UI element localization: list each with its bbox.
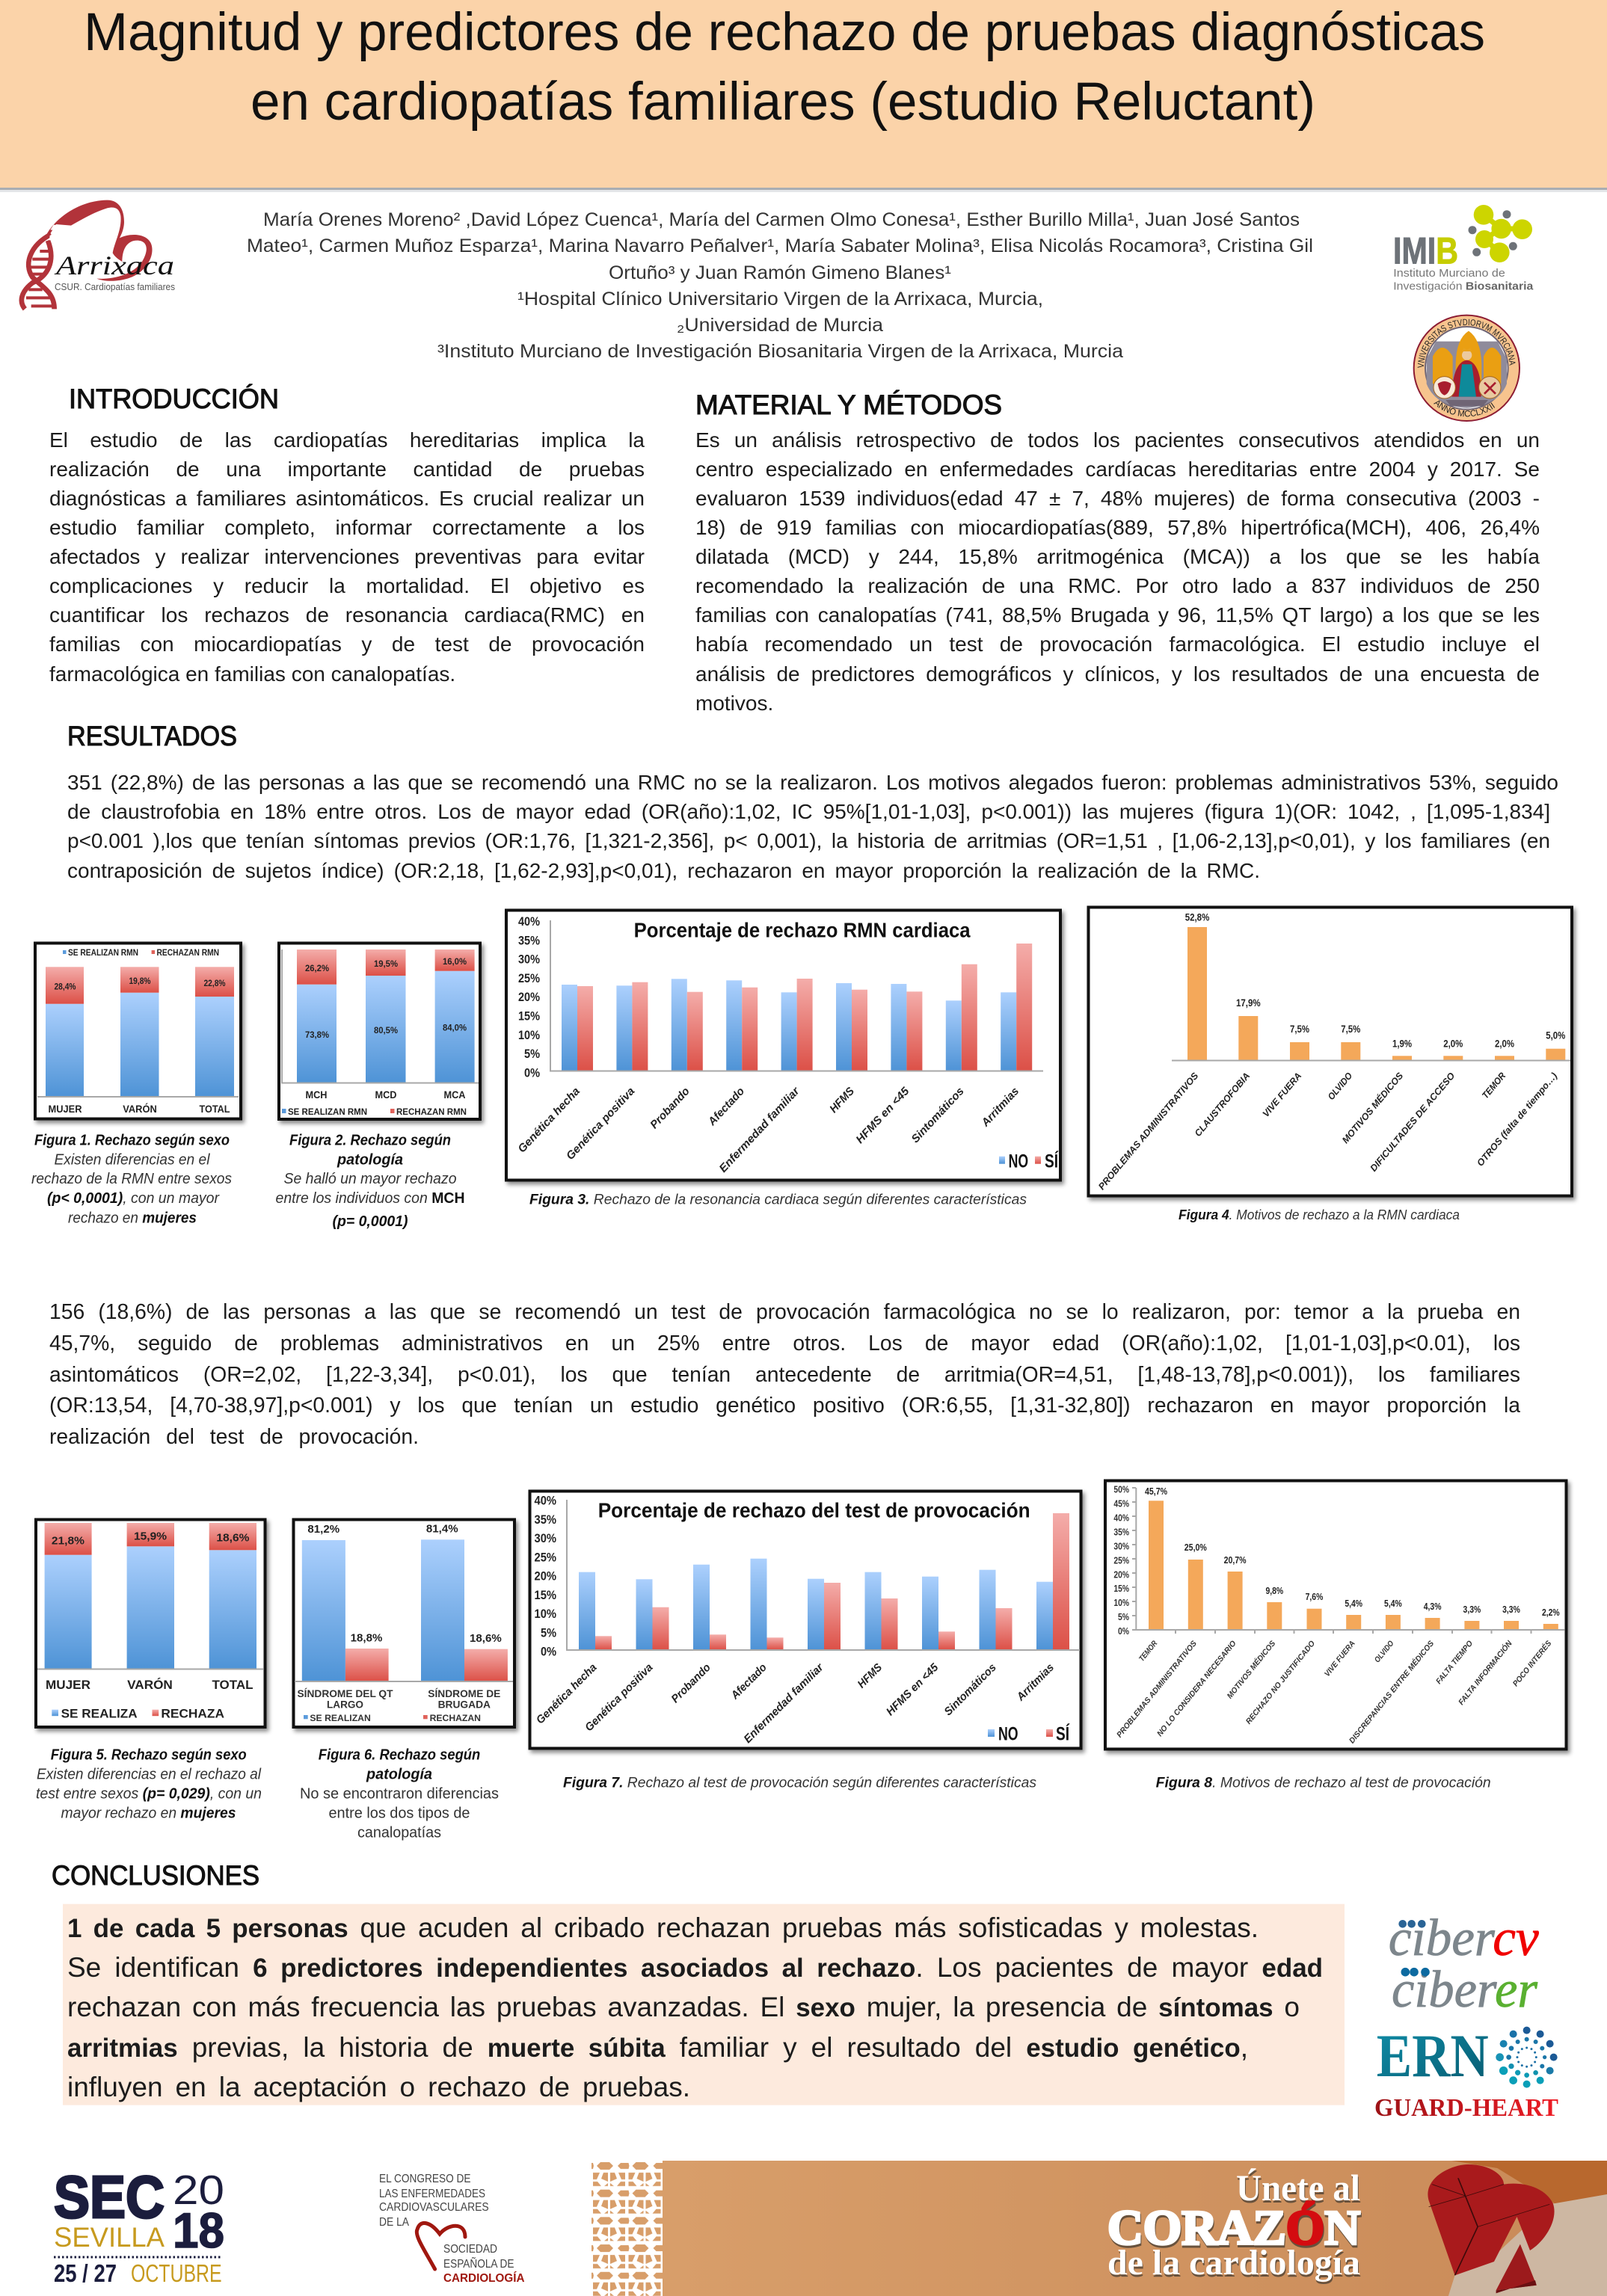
value labels: 17,9% <box>1236 997 1261 1009</box>
value labels: 4,3% <box>1424 1601 1441 1612</box>
value labels: 3,3% <box>1463 1604 1481 1615</box>
value labels: 7,5% <box>1341 1023 1361 1035</box>
text block: conclusiones: 1 de cada 5 personas que acuden al cribado rechazan pruebas más sofisticadas y molestas. <box>67 1912 1259 1943</box>
text block: introduccion: cuantificar los rechazos de resonancia cardiaca(RMC) en <box>49 603 645 627</box>
value labels: 5,4% <box>1345 1598 1362 1609</box>
x axis labels: Arritmias <box>1014 1661 1057 1704</box>
values and categories: TOTAL <box>212 1678 253 1692</box>
x axis labels: Probando <box>669 1661 713 1705</box>
values and categories: MCD <box>375 1089 396 1101</box>
x axis labels: MOTIVOS MÉDICOS <box>1225 1639 1277 1700</box>
x axis labels: PROBLEMAS ADMINISTRATIVOS <box>1096 1070 1201 1192</box>
values and categories: 16,0% <box>443 956 467 967</box>
grouped bars <box>295 1539 513 1681</box>
values and categories: 26,2% <box>305 963 329 973</box>
caption figure 4: Figura 4. Motivos de rechazo a la RMN cardiaca <box>1179 1207 1460 1222</box>
slogan <box>1107 2167 1360 2283</box>
text block: conclusiones <box>67 1912 1323 2102</box>
caption figure 2: Se halló un mayor rechazo <box>284 1171 456 1187</box>
authors and affiliations: Mateo¹, Carmen Muñoz Esparza¹, Marina Navarro Peñalver¹, María Sabater Molina³, Elisa Nicolás Rocamora³, Cristina Gil <box>247 236 1313 256</box>
text block: resultados RMC: p<0.001 ),los que tenían síntomas previos (OR:1,76, [1,321-2,356], p< 0,001), la historia de arritmias (OR=1,51 , [1,06-2,13],p<0,01), y los familiares (en <box>67 829 1550 852</box>
slogan: CORAZÓN <box>1107 2201 1360 2256</box>
logo: cibercv: cibercv <box>1389 1909 1540 1967</box>
values <box>307 1522 502 1645</box>
value labels: 5,4% <box>1384 1598 1402 1609</box>
authors and affiliations: ¹Hospital Clínico Universitario Virgen de la Arrixaca, Murcia, <box>517 289 1043 310</box>
x axis labels: Enfermedad familiar <box>716 1084 802 1175</box>
x axis labels <box>515 1084 1021 1175</box>
values and categories: VARÓN <box>127 1678 173 1692</box>
legend: NO <box>998 1723 1018 1744</box>
values and categories: 84,0% <box>443 1023 467 1033</box>
legend: RECHAZA <box>161 1708 224 1721</box>
y axis labels: 0% <box>524 1066 540 1080</box>
logo: SEC 2018 Sevilla: 25 / 27 <box>54 2259 117 2287</box>
y axis labels: 30% <box>1113 1540 1129 1551</box>
caption figure 1 <box>31 1133 232 1227</box>
heart puzzle <box>1428 2164 1555 2275</box>
values and categories: MCH <box>305 1089 328 1101</box>
figure 7: porcentaje de rechazo del test de provocacion <box>529 1491 1081 1748</box>
caption figure 5: Existen diferencias en el rechazo al <box>37 1766 262 1782</box>
y axis labels: 15% <box>518 1009 540 1023</box>
caption figure 6: entre los dos tipos de <box>329 1806 470 1822</box>
x axis labels: Arritmias <box>979 1085 1021 1130</box>
value labels: 20,7% <box>1224 1555 1247 1566</box>
logo: Sociedad Espanola de Cardiologia: CARDIOLOGÍA <box>443 2272 525 2285</box>
title: Magnitud y predictores de rechazo de pruebas diagnósticas <box>84 3 1485 62</box>
value labels: 2,2% <box>1542 1607 1560 1618</box>
y axis labels: 10% <box>1113 1597 1129 1608</box>
text block: material y metodos: dilatada (MCD) y 244, 15,8% arritmogénica (MCA)) a los que se les había <box>695 545 1540 568</box>
logo: SEC 2018 Sevilla: 20 <box>173 2167 224 2213</box>
values and categories: 15,9% <box>134 1530 167 1543</box>
x axis labels: POCO INTERÉS <box>1511 1639 1553 1688</box>
logo: Sociedad Espanola de Cardiologia: EL CONGRESO DE <box>379 2173 471 2185</box>
authors and affiliations: Ortuño³ y Juan Ramón Gimeno Blanes¹ <box>609 262 951 283</box>
y axis labels: 10% <box>534 1607 556 1621</box>
authors and affiliations: María Orenes Moreno² ,David López Cuenca¹, María del Carmen Olmo Conesa¹, Esther Burillo Milla¹, Juan José Santos <box>263 209 1300 230</box>
logo: Arrixaca CSUR <box>22 200 175 309</box>
x axis labels: DISCREPANCIAS ENTRE MÉDICOS <box>1347 1639 1436 1745</box>
logo: Universidad de Murcia seal: VNIVERSITAS STVDIORVM MVRCIANA <box>1418 318 1515 368</box>
logo: ERN: ERN <box>1377 2022 1489 2090</box>
caption figure 6: Figura 6. Rechazo según <box>319 1746 480 1763</box>
text block: introduccion: estudio familiar completo, informar correctamente a los <box>49 516 645 539</box>
figure 5: rechazo test segun sexo <box>36 1519 265 1727</box>
values: 81,2% <box>307 1523 339 1536</box>
y axis labels: 50% <box>1113 1483 1129 1495</box>
legend: RECHAZAN RMN <box>396 1107 467 1117</box>
logo: Universidad de Murcia seal: ANNO MCCLXXII <box>1434 401 1496 417</box>
text block: material y metodos: 18) de 919 familias con miocardiopatías(889, 57,8% hipertrófica(MCH), 406, 26,4% <box>695 516 1540 539</box>
x axis labels: FALTA INFORMACIÓN <box>1456 1638 1514 1707</box>
y axis labels: 35% <box>518 934 540 947</box>
logo: Sociedad Espanola de Cardiologia: SOCIEDAD <box>443 2243 497 2256</box>
y axis labels: 15% <box>1113 1583 1129 1594</box>
text block: introduccion: farmacológica en familias con canalopatías. <box>49 662 455 686</box>
text block: resultados test de provocacion: (OR:13,54, [4,70-38,97],p<0.001) y los que tenían un estudio genético positivo (OR:6,55, [1,31-32,80]) rechazaron en mayor proporción la <box>49 1393 1520 1417</box>
logo: IMIB: Instituto Murciano de <box>1393 267 1505 280</box>
categories: SÍNDROME DEL QT <box>298 1687 393 1699</box>
logo: SEC 2018 Sevilla: OCTUBRE <box>131 2259 222 2287</box>
footer banner <box>592 2161 1607 2296</box>
caption figure 2 <box>275 1133 465 1230</box>
x axis labels: FALTA TIEMPO <box>1434 1639 1475 1686</box>
x axis labels: TEMOR <box>1137 1639 1160 1663</box>
text block: introduccion: El estudio de las cardiopatías hereditarias implica la <box>49 428 645 452</box>
text block: resultados RMC: de claustrofobia en 18% entre otros. Los de mayor edad (OR(año):1,02, IC 95%[1,01-1,03], p<0.001)) las mujeres (figura 1)(OR: 1042, , [1,095-1,834] <box>67 800 1550 823</box>
x axis labels: Sintomáticos <box>909 1085 967 1145</box>
x axis labels <box>1115 1638 1553 1745</box>
x axis labels: HFMS <box>855 1661 885 1690</box>
y axis labels: 10% <box>518 1029 540 1042</box>
y axis labels: 35% <box>1113 1526 1129 1537</box>
y axis labels: 20% <box>1113 1569 1129 1580</box>
y axis labels <box>534 1495 556 1659</box>
value labels: 52,8% <box>1185 911 1210 923</box>
x axis labels: HFMS en <45 <box>853 1085 912 1146</box>
x axis labels: Genética hecha <box>515 1085 583 1155</box>
caption figure 1: rechazo en mujeres <box>68 1210 197 1227</box>
legend: SE REALIZAN <box>310 1714 371 1723</box>
legend <box>304 1714 481 1723</box>
values and categories <box>46 1530 253 1692</box>
text block: material y metodos <box>695 428 1540 715</box>
y axis labels: 15% <box>534 1589 556 1602</box>
caption figure 5: test entre sexos (p= 0,029), con un <box>36 1786 262 1803</box>
values and categories: 21,8% <box>52 1534 85 1548</box>
text block: resultados test de provocacion: 156 (18,6%) de las personas a las que se recomendó un test de provocación farmacológica no se lo realizaron, por: temor a la prueba en <box>49 1299 1520 1323</box>
value labels: 3,3% <box>1502 1604 1520 1615</box>
chart title: Porcentaje de rechazo RMN cardiaca <box>634 918 971 941</box>
text block: resultados test de provocacion: 45,7%, seguido de problemas administrativos en un 25% entre otros. Los de mayor edad (OR(año):1,02, [1,01-1,03],p<0.01), los <box>49 1331 1520 1355</box>
y axis labels: 0% <box>1118 1625 1129 1637</box>
x axis labels: HFMS en <45 <box>884 1661 941 1718</box>
caption figure 2: Figura 2. Rechazo según <box>289 1133 451 1149</box>
logo: GUARD-HEART: GUARD-HEART <box>1374 2094 1558 2122</box>
legend: RECHAZAN RMN <box>157 949 219 958</box>
x axis labels: DIFICULTADES DE ACCESO <box>1368 1071 1457 1174</box>
logo: IMIB <box>1393 205 1534 292</box>
y axis labels: 30% <box>534 1532 556 1545</box>
x axis labels: VIVE FUERA <box>1323 1639 1357 1678</box>
heading: material y metodos: MATERIAL Y MÉTODOS <box>695 390 1002 420</box>
logo: SEC 2018 Sevilla: SEC <box>54 2164 165 2230</box>
value labels <box>1185 911 1566 1049</box>
authors and affiliations <box>247 209 1313 362</box>
caption figure 2: (p= 0,0001) <box>332 1213 408 1230</box>
values: 18,6% <box>470 1632 502 1645</box>
logo: Universidad de Murcia seal <box>1413 314 1520 422</box>
x axis labels: Probando <box>648 1085 692 1131</box>
text block: introduccion: familias con miocardiopatías y de test de provocación <box>49 633 645 656</box>
caption figure 8: Figura 8. Motivos de rechazo al test de provocación <box>1156 1776 1491 1791</box>
text block: conclusiones: influyen en la aceptación o rechazo de pruebas. <box>67 2072 690 2102</box>
logo: Sociedad Espanola de Cardiologia: ESPAÑOLA DE <box>443 2258 514 2271</box>
caption figure 1: Existen diferencias en el <box>54 1152 210 1169</box>
caption figure 7: Figura 7. Rechazo al test de provocación según diferentes características <box>563 1776 1037 1791</box>
x axis labels: RECHAZO NO JUSTIFICADO <box>1244 1639 1317 1726</box>
values and categories: 22,8% <box>203 978 226 988</box>
value labels: 25,0% <box>1184 1542 1207 1553</box>
heading: resultados: RESULTADOS <box>67 721 237 751</box>
values and categories: MUJER <box>46 1678 90 1692</box>
stacked bars <box>282 950 479 1083</box>
logo: Sociedad Espanola de Cardiologia <box>379 2173 525 2285</box>
legend <box>52 1708 224 1721</box>
text block: introduccion: complicaciones y reducir la mortalidad. El objetivo es <box>49 574 645 597</box>
values and categories: 19,8% <box>129 976 151 986</box>
authors and affiliations: ³Instituto Murciano de Investigación Biosanitaria Virgen de la Arrixaca, Murcia <box>437 341 1123 362</box>
slogan: de la cardiología <box>1107 2243 1360 2283</box>
legend: SÍ <box>1056 1723 1070 1744</box>
figure 6: rechazo test segun patologia <box>293 1519 514 1727</box>
caption figure 3: Figura 3. Rechazo de la resonancia cardiaca según diferentes características <box>529 1192 1027 1208</box>
y axis labels: 5% <box>541 1627 556 1640</box>
x axis labels <box>1096 1070 1559 1192</box>
text block: introduccion: realización de una importante cantidad de pruebas <box>49 458 645 481</box>
legend <box>988 1723 1070 1744</box>
heading: introduccion: INTRODUCCIÓN <box>69 384 279 414</box>
caption figure 2: entre los individuos con MCH <box>275 1190 465 1207</box>
values and categories: 28,4% <box>54 981 76 991</box>
text block: resultados RMC: contraposición de sujetos índice) (OR:2,18, [1,62-2,93],p<0,01), rechazaron en mayor proporción la realización de la RMC. <box>67 859 1260 882</box>
value labels: 7,5% <box>1290 1023 1309 1035</box>
y axis labels: 35% <box>534 1513 556 1527</box>
text block: material y metodos: familias con canalopatías (741, 88,5% Brugada y 96, 11,5% QT largo) a los que se les <box>695 603 1540 627</box>
x axis labels: PROBLEMAS ADMINISTRATIVOS <box>1115 1639 1199 1740</box>
logo: ciberer: ciberer <box>1392 1961 1538 2019</box>
caption figure 1: (p< 0,0001), con un mayor <box>47 1190 220 1207</box>
text block: material y metodos: recomendado la realización de una RMC. Por otro lado a 837 individuos de 250 <box>695 574 1540 597</box>
values and categories <box>48 976 230 1115</box>
y axis labels: 20% <box>518 991 540 1004</box>
bars and axes <box>1132 1488 1565 1634</box>
x axis labels: OLVIDO <box>1326 1071 1354 1102</box>
legend <box>282 1107 467 1117</box>
x axis labels: Afectado <box>705 1085 747 1129</box>
x axis labels: HFMS <box>827 1085 857 1115</box>
values and categories: MCA <box>444 1089 465 1101</box>
values and categories: 18,6% <box>216 1531 249 1545</box>
figure 2: rechazo RMN segun patologia <box>279 944 480 1119</box>
y axis labels: 5% <box>1118 1611 1129 1622</box>
text block: material y metodos: había recomendado un test de provocación farmacológica. El estudio incluye el <box>695 633 1540 656</box>
value labels: 7,6% <box>1306 1592 1323 1602</box>
title: en cardiopatías familiares (estudio Reluctant) <box>251 73 1315 132</box>
categories: LARGO <box>327 1698 363 1710</box>
header band with title <box>0 0 1607 192</box>
values and categories: MUJER <box>48 1103 82 1115</box>
x axis labels: TEMOR <box>1480 1071 1508 1101</box>
conclusions panel background <box>63 1904 1345 2105</box>
x axis labels: Genética hecha <box>534 1661 600 1726</box>
y axis labels: 25% <box>518 972 540 985</box>
caption figure 2: patología <box>337 1152 403 1169</box>
legend: NO <box>1009 1151 1028 1172</box>
values: 81,4% <box>426 1522 458 1536</box>
text block: conclusiones: Se identifican 6 predictores independientes asociados al rechazo. Los pacientes de mayor edad <box>67 1952 1323 1983</box>
value labels: 2,0% <box>1443 1037 1463 1049</box>
caption figure 5: mayor rechazo en mujeres <box>61 1806 236 1822</box>
x axis labels: MOTIVOS MÉDICOS <box>1339 1070 1406 1145</box>
value labels: 1,9% <box>1392 1037 1412 1049</box>
y axis labels: 20% <box>534 1570 556 1583</box>
y axis labels: 25% <box>1113 1554 1129 1566</box>
stacked bars <box>37 1523 263 1669</box>
text block: introduccion: diagnósticas a familiares asintomáticos. Es crucial realizar un <box>49 487 645 510</box>
legend <box>63 949 219 958</box>
value labels: 45,7% <box>1145 1486 1167 1497</box>
title <box>84 3 1485 132</box>
legend: RECHAZAN <box>430 1714 481 1723</box>
y axis labels: 40% <box>534 1495 556 1508</box>
caption figure 5 <box>36 1746 262 1822</box>
text block: material y metodos: centro especializado en enfermedades cardíacas hereditarias entre 2004 y 2017. Se <box>695 458 1540 481</box>
legend: SE REALIZAN RMN <box>68 949 138 958</box>
y axis labels: 30% <box>518 953 540 967</box>
text block: material y metodos: análisis de predictores demográficos y clínicos, y los resultados de una encuesta de <box>695 662 1540 686</box>
y axis labels: 40% <box>1113 1512 1129 1523</box>
values and categories: VARÓN <box>123 1102 157 1115</box>
values and categories: 80,5% <box>374 1025 398 1035</box>
y axis labels <box>518 915 540 1080</box>
text block: conclusiones: arritmias previas, la historia de muerte súbita familiar y el resultado del estudio genético, <box>67 2032 1248 2063</box>
heading: conclusiones: CONCLUSIONES <box>52 1860 259 1891</box>
caption figure 6 <box>300 1746 499 1841</box>
text block: introduccion <box>49 428 645 686</box>
figure 8: motivos de rechazo al test de provocacion <box>1105 1480 1566 1749</box>
text block: resultados test de provocacion: asintomáticos (OR=2,02, [1,22-3,34], p<0.01), los que tenían antecedente de arritmia(OR=4,51, [1,48-13,78],p<0.001)), los familiares <box>49 1362 1520 1386</box>
caption figure 6: canalopatías <box>357 1825 441 1841</box>
caption figure 1: rechazo de la RMN entre sexos <box>31 1171 232 1187</box>
slogan: Únete al <box>1236 2167 1360 2209</box>
text block: resultados RMC <box>67 771 1558 882</box>
x axis labels: OTROS (falta de tiempo…) <box>1475 1071 1559 1169</box>
x axis labels: CLAUSTROFOBIA <box>1193 1071 1252 1139</box>
x axis labels: Genética positiva <box>583 1661 656 1734</box>
caption figure 1: Figura 1. Rechazo según sexo <box>34 1133 230 1149</box>
categories: BRUGADA <box>438 1698 491 1710</box>
values and categories: 19,5% <box>374 958 398 969</box>
logo: SEC 2018 Sevilla: SEVILLA <box>54 2222 165 2253</box>
y axis labels: 40% <box>518 915 540 929</box>
grouped bars <box>567 1500 1080 1650</box>
x axis labels <box>534 1661 1057 1746</box>
logo: Sociedad Espanola de Cardiologia: CARDIOVASCULARES <box>379 2201 489 2214</box>
legend: SÍ <box>1045 1151 1059 1172</box>
bars <box>1172 927 1570 1060</box>
legend: SE REALIZAN RMN <box>288 1107 367 1117</box>
logo: Sociedad Espanola de Cardiologia: DE LA <box>379 2216 410 2229</box>
legend <box>999 1151 1059 1172</box>
x axis labels: Genética positiva <box>564 1085 637 1163</box>
caption figure 6: No se encontraron diferencias <box>300 1786 499 1803</box>
x axis labels: OLVIDO <box>1373 1639 1396 1664</box>
legend: SE REALIZA <box>61 1708 138 1721</box>
text block: introduccion: afectados y realizar intervenciones preventivas para evitar <box>49 545 645 568</box>
values and categories: TOTAL <box>199 1103 230 1115</box>
values and categories: 73,8% <box>305 1029 329 1040</box>
text block: conclusiones: rechazan con más frecuencia las pruebas avanzadas. El sexo mujer, la presencia de síntomas o <box>67 1992 1300 2022</box>
figure 1: rechazo RMN segun sexo <box>35 944 241 1118</box>
logo: Arrixaca CSUR: CSUR. Cardiopatías familiares <box>55 281 175 292</box>
text block: resultados test de provocacion: realización del test de provocación. <box>49 1424 419 1448</box>
caption figure 6: patología <box>366 1766 432 1782</box>
grouped bars <box>550 920 1043 1071</box>
logo: Arrixaca CSUR: Arrixaca <box>55 250 174 280</box>
logo: SEC 2018 Sevilla <box>54 2164 224 2287</box>
text block: material y metodos: Es un análisis retrospectivo de todos los pacientes consecutivos atendidos en un <box>695 428 1540 452</box>
x axis labels: Enfermedad familiar <box>741 1661 826 1746</box>
figure 4: motivos de rechazo a la RMN <box>1089 908 1572 1196</box>
y axis labels: 5% <box>524 1047 540 1061</box>
value labels: 2,0% <box>1495 1037 1514 1049</box>
categories: SÍNDROME DE <box>428 1687 500 1699</box>
caption figure 5: Figura 5. Rechazo según sexo <box>51 1746 247 1763</box>
value labels: 5,0% <box>1546 1029 1566 1041</box>
x axis labels: Afectado <box>728 1661 769 1702</box>
y axis labels: 0% <box>541 1646 556 1659</box>
categories <box>298 1687 500 1710</box>
logo: IMIB: Investigación Biosanitaria <box>1393 280 1534 292</box>
logo: Sociedad Espanola de Cardiologia: LAS ENFERMEDADES <box>379 2188 485 2200</box>
y axis labels: 25% <box>534 1551 556 1564</box>
banner background shapes <box>1428 2161 1607 2296</box>
y axis labels: 45% <box>1113 1498 1129 1509</box>
x axis labels: NO LO CONSIDERA NECESARIO <box>1155 1639 1238 1738</box>
y axis labels <box>1113 1483 1129 1637</box>
text block: resultados test de provocacion <box>49 1299 1520 1448</box>
value labels <box>1145 1486 1560 1618</box>
text block: material y metodos: evaluaron 1539 individuos(edad 47 ± 7, 48% mujeres) de forma consecutiva (2003 - <box>695 487 1540 510</box>
values and categories <box>305 956 467 1101</box>
logo: SEC 2018 Sevilla: 18 <box>173 2203 224 2258</box>
value labels: 9,8% <box>1265 1586 1283 1596</box>
text block: resultados RMC: 351 (22,8%) de las personas a las que se recomendó una RMC no se la realizaron. Los motivos alegados fueron: problemas administrativos 53%, seguido <box>67 771 1558 794</box>
text block: material y metodos: motivos. <box>695 692 773 715</box>
x axis labels: VIVE FUERA <box>1261 1071 1303 1119</box>
x axis labels: Sintomáticos <box>941 1661 999 1718</box>
logo: IMIB: IMIB <box>1393 230 1458 272</box>
figure 3: porcentaje de rechazo RMN cardiaca <box>506 911 1060 1180</box>
authors and affiliations: ₂Universidad de Murcia <box>677 315 883 336</box>
values: 18,8% <box>351 1631 382 1645</box>
stacked bars <box>37 967 239 1097</box>
chart title: Porcentaje de rechazo del test de provocación <box>598 1498 1030 1521</box>
